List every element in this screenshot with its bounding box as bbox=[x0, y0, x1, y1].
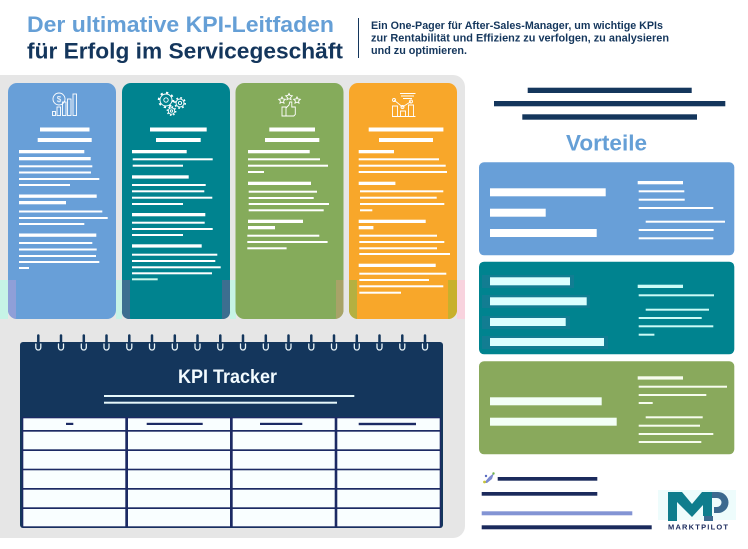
card text lines bbox=[19, 128, 108, 269]
intro text: und zu optimieren. bbox=[371, 45, 467, 57]
heading: Vorteile: Vorteile bbox=[566, 130, 647, 156]
benefit bars bbox=[490, 188, 606, 237]
footer note bbox=[482, 472, 652, 529]
panel: KPI tracker bbox=[20, 336, 443, 528]
intro text: Ein One-Pager für After-Sales-Manager, um wichtige KPIs bbox=[371, 20, 663, 32]
icon: coin and bar chart bbox=[52, 93, 76, 116]
card text lines bbox=[132, 128, 221, 280]
logo mark P bbox=[712, 492, 728, 513]
benefit bars bbox=[482, 275, 608, 349]
panel: benefit green bbox=[479, 361, 734, 454]
benefit text lines bbox=[638, 181, 725, 239]
table column headers bbox=[66, 423, 416, 425]
card text lines bbox=[359, 128, 450, 294]
panel: grey background bbox=[0, 75, 465, 538]
title bbox=[27, 12, 343, 64]
header bbox=[27, 12, 669, 64]
benefit text lines bbox=[638, 285, 714, 336]
benefit bars bbox=[490, 397, 617, 426]
icon: coin and bar chart: $ bbox=[57, 95, 62, 104]
colour band behind cards bbox=[0, 280, 465, 319]
icon: rocket bbox=[483, 472, 495, 483]
title: für Erfolg im Servicegeschäft bbox=[27, 38, 343, 64]
card text lines bbox=[247, 128, 329, 249]
icon: gears bbox=[159, 93, 185, 115]
panel: benefit teal bbox=[479, 262, 734, 354]
panel: KPI card green bbox=[236, 83, 344, 319]
tracker heading: KPI Tracker bbox=[178, 367, 278, 388]
logo wordmark: MARKTPILOT bbox=[668, 522, 728, 532]
panel: KPI card teal bbox=[122, 83, 230, 319]
intro text bbox=[371, 20, 669, 57]
icon: thumbs up with stars bbox=[279, 94, 300, 116]
tracker table bbox=[22, 417, 441, 528]
tracker subtitle lines bbox=[104, 395, 354, 404]
logo: Marktpilot bbox=[658, 490, 736, 532]
benefit text lines bbox=[638, 376, 727, 443]
intro text: zur Rentabilität und Effizienz zu verfolgen, zu analysieren bbox=[371, 32, 669, 44]
spiral rings bbox=[36, 336, 428, 350]
panel: top right lines bbox=[494, 88, 725, 120]
title: Der ultimative KPI-Leitfaden bbox=[27, 12, 334, 37]
panel: KPI card orange bbox=[349, 83, 457, 319]
icon: bar and line chart bbox=[392, 94, 416, 116]
footer text lines bbox=[482, 477, 652, 529]
panel: KPI card blue bbox=[8, 83, 116, 319]
logo mark M bbox=[668, 492, 712, 521]
header divider bbox=[358, 18, 359, 58]
panel: benefit blue bbox=[479, 162, 734, 255]
